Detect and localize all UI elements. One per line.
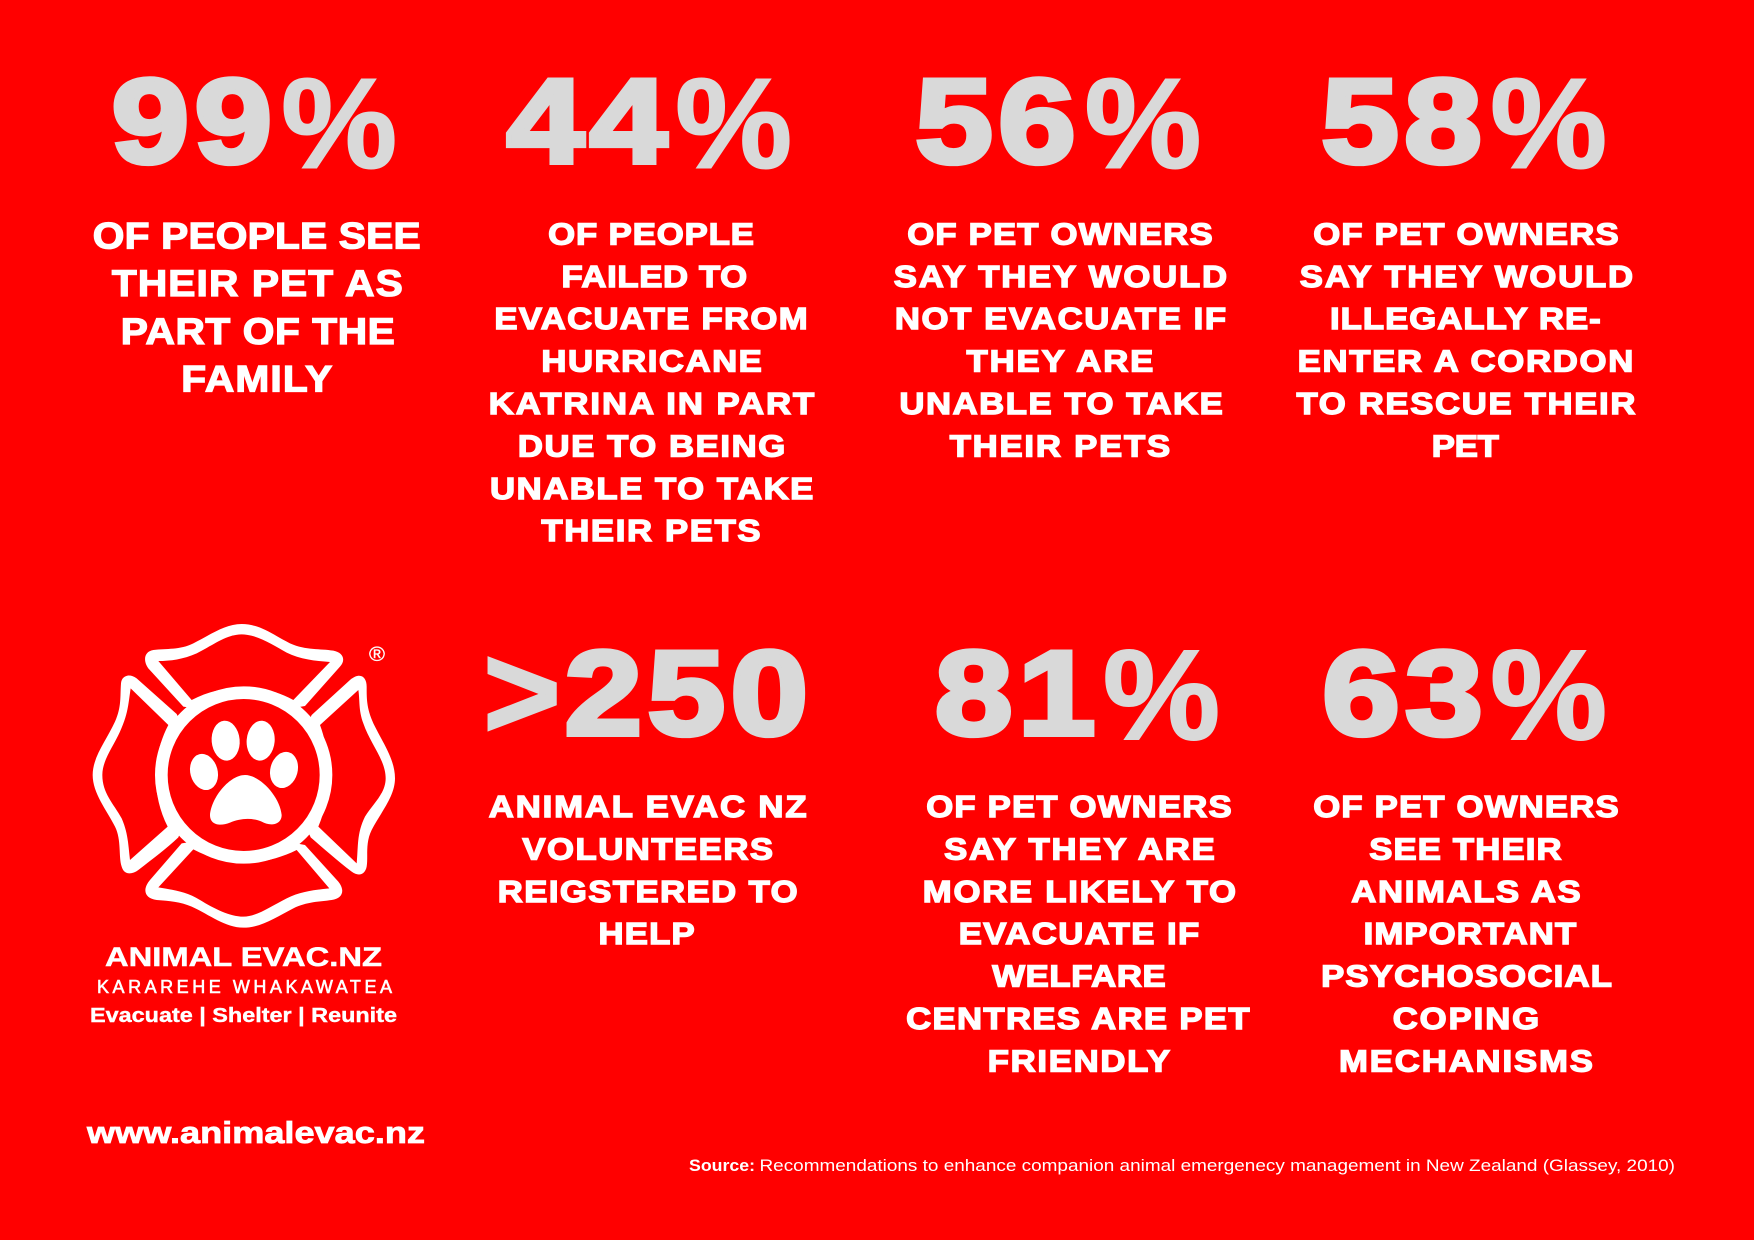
text: 81% description: EVACUATE IF: [959, 916, 1199, 951]
stat: 56%: [894, 52, 1227, 463]
number 56%: [915, 52, 1201, 196]
text: 56% description: THEY ARE: [966, 343, 1153, 378]
text: 44% description: EVACUATE FROM: [494, 301, 808, 336]
text: 56% description: NOT EVACUATE IF: [895, 301, 1226, 336]
number 63%: 63: [1322, 626, 1488, 760]
text: 63% description: SEE THEIR: [1369, 831, 1562, 866]
number 81%: %: [1103, 624, 1220, 767]
text: 44% description: HURRICANE: [541, 343, 762, 378]
number 56%: %: [1085, 52, 1201, 196]
text: 44% description: THEIR PETS: [541, 513, 761, 548]
number 99%: 99: [112, 54, 278, 188]
logo name: ANIMAL EVAC.NZ: [105, 942, 382, 972]
number 44%: 44: [507, 54, 673, 188]
website url: www.animalevac.nz: [86, 1115, 425, 1150]
text: 63% description: [1313, 789, 1619, 1078]
text: 58% description: SAY THEY WOULD: [1300, 259, 1633, 293]
text: 81% description: SAY THEY ARE: [944, 831, 1215, 866]
text: 63% description: COPING: [1393, 1001, 1539, 1036]
text: 58% description: OF PET OWNERS: [1313, 216, 1619, 251]
text: >250 description: VOLUNTEERS: [522, 831, 773, 866]
text: 56% description: THEIR PETS: [950, 428, 1170, 463]
text: 81% description: OF PET OWNERS: [926, 789, 1232, 824]
stat: 63%: [1313, 624, 1619, 1078]
text: 58% description: ENTER A CORDON: [1298, 343, 1633, 378]
text: >250 description: [489, 789, 807, 951]
logo: Animal Evac NZ: [90, 624, 397, 1027]
text: 81% description: FRIENDLY: [988, 1043, 1170, 1078]
text: 63% description: MECHANISMS: [1339, 1043, 1593, 1078]
text: 56% description: SAY THEY WOULD: [894, 259, 1227, 293]
text: 99% description: [93, 216, 421, 400]
number >250: >: [484, 618, 561, 766]
text: 44% description: FAILED TO: [562, 259, 747, 293]
logo subtitle: KARAREHE WHAKAWATEA: [97, 977, 392, 997]
number 63%: %: [1490, 624, 1607, 767]
text: 81% description: CENTRES ARE PET: [906, 1001, 1250, 1036]
text: >250 description: ANIMAL EVAC NZ: [489, 789, 807, 824]
text: 63% description: IMPORTANT: [1364, 916, 1576, 951]
text: 81% description: MORE LIKELY TO: [923, 874, 1236, 908]
text: 58% description: TO RESCUE THEIR: [1296, 386, 1636, 421]
text: 44% description: OF PEOPLE: [548, 216, 754, 251]
text: 58% description: [1296, 216, 1636, 463]
number 81%: 81: [935, 626, 1101, 760]
text: 44% description: DUE TO BEING: [518, 428, 785, 463]
text: >250 description: REIGSTERED TO: [498, 874, 798, 908]
number 44%: [507, 52, 792, 196]
number 56%: 56: [915, 54, 1081, 188]
icon: maltese cross with paw: [93, 624, 395, 928]
stat: >250: [484, 618, 814, 951]
stat: 81%: [906, 624, 1250, 1078]
text: 58% description: PET: [1432, 428, 1499, 463]
registered mark: ®: [369, 644, 385, 666]
text: >250 description: HELP: [598, 916, 695, 951]
text: 63% description: ANIMALS AS: [1351, 874, 1581, 908]
text: 81% description: WELFARE: [992, 958, 1166, 993]
stat: 99%: [93, 52, 421, 400]
stat: 44%: [489, 52, 814, 548]
text: 99% description: THEIR PET AS: [112, 264, 403, 305]
text: 44% description: KATRINA IN PART: [489, 386, 814, 421]
text: 44% description: UNABLE TO TAKE: [490, 471, 813, 505]
text: 99% description: FAMILY: [181, 359, 332, 400]
source citation: Recommendations to enhance companion animal emergenecy management in New Zealand (Glassey, 2010): [760, 1156, 1675, 1175]
text: 56% description: UNABLE TO TAKE: [899, 386, 1223, 421]
text: 63% description: OF PET OWNERS: [1313, 789, 1619, 824]
number 58%: 58: [1321, 54, 1487, 188]
number 99%: %: [281, 52, 397, 196]
number 99%: [112, 52, 397, 196]
text: 99% description: PART OF THE: [121, 311, 395, 352]
logo tagline: Evacuate | Shelter | Reunite: [90, 1005, 397, 1027]
number >250: 250: [565, 626, 814, 760]
number 58%: %: [1490, 52, 1607, 196]
text: 56% description: OF PET OWNERS: [907, 216, 1213, 251]
text: 44% description: [489, 216, 814, 548]
number >250: [484, 618, 814, 766]
number 63%: [1322, 624, 1607, 767]
text: 63% description: PSYCHOSOCIAL: [1321, 958, 1612, 993]
text: 56% description: [894, 216, 1227, 463]
source citation: Source:: [689, 1156, 755, 1175]
number 44%: %: [675, 52, 792, 196]
text: 81% description: [906, 789, 1250, 1078]
text: 99% description: OF PEOPLE SEE: [93, 216, 421, 257]
text: 58% description: ILLEGALLY RE-: [1330, 301, 1601, 336]
stat: 58%: [1296, 52, 1636, 463]
number 58%: [1321, 52, 1607, 196]
number 81%: [935, 624, 1220, 767]
